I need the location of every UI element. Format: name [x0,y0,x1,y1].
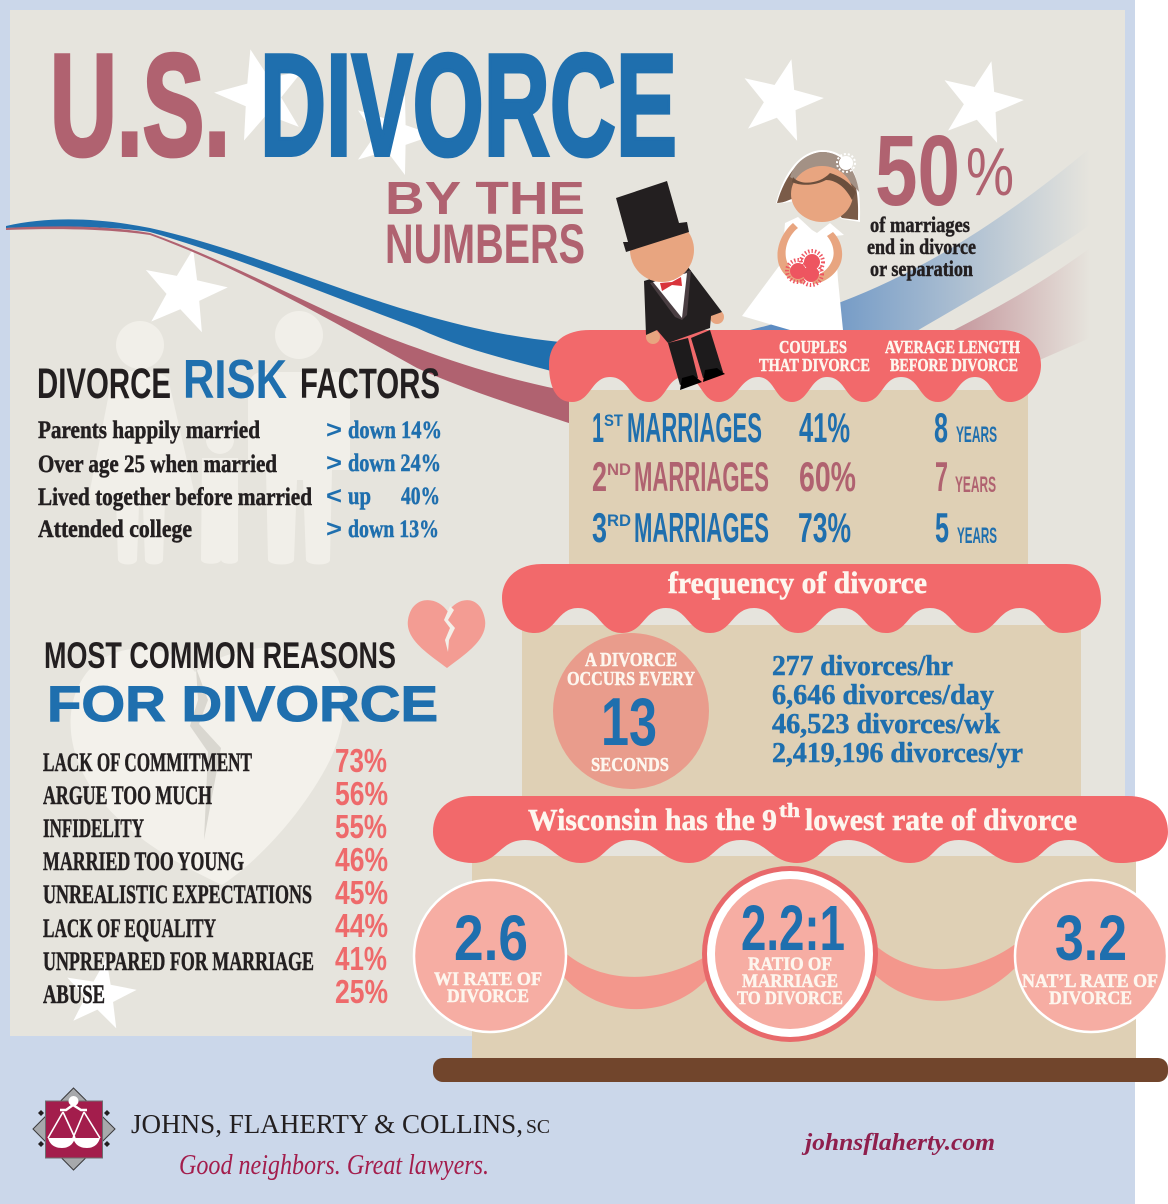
text block: reasons list: UNPREPARED FOR MARRIAGE [43,947,314,976]
table: marriages statistics: 3 [592,504,607,551]
table header: couples and length: THAT DIVORCE [759,355,870,375]
icon: law firm logo scales [33,1088,115,1170]
circle: a divorce every 13 seconds: OCCURS EVERY [567,668,695,690]
text block: reasons list: LACK OF COMMITMENT [43,748,252,777]
circle: ratio of marriage to divorce [702,866,878,1042]
text: firm name and tagline [131,1109,550,1181]
text block: risk factor list: down 13% [348,516,439,543]
text block: reasons list: ABUSE [43,980,105,1009]
circle: national rate of divorce: 3.2 [1055,902,1127,974]
cake: bottom tier [433,796,1168,1060]
table: marriages statistics: 41% [799,404,850,451]
cake: swags between circles [562,942,1018,1009]
text block: reasons percentages [335,742,388,1010]
text block: divorce rates [772,651,1023,769]
text block: risk factor list: down 14% [348,417,442,444]
table: marriages statistics [592,404,997,551]
text block: divorce rates: 46,523 divorces/wk [772,709,1000,740]
text block: reasons percentages: 73% [335,742,387,779]
table: marriages statistics: 73% [798,504,851,551]
table: marriages statistics: 5 [935,504,949,551]
text block: risk factor list: Over age 25 when married [38,451,277,478]
callout: 50 percent: of marriages [870,212,970,237]
text block: reasons percentages: 46% [335,841,388,878]
table: marriages statistics: MARRIAGES [627,404,762,451]
text: firm name and tagline: Good neighbors. Great lawyers. [179,1150,489,1181]
silhouette: broken heart behind reasons [71,647,343,885]
circle: a divorce every 13 seconds: 13 [601,684,657,760]
cake: middle tier [502,564,1101,800]
heading: most common reasons for divorce [44,635,438,732]
heading: divorce risk factors [37,348,440,410]
text block: reasons list [43,748,314,1009]
callout: 50 percent: end in divorce [867,234,976,259]
icon: broken heart [408,600,485,668]
background stars [60,38,1031,1031]
text block: risk factor list: down 24% [348,450,441,477]
heading: divorce risk factors: DIVORCE [37,360,171,408]
title: NUMBERS [385,212,585,275]
title: DIVORCE [260,24,677,186]
table: marriages statistics: ST [604,411,624,430]
circle: ratio of marriage to divorce: MARRIAGE [742,971,838,992]
ribbon: fading blue band at right [750,148,1090,332]
circle: ratio of marriage to divorce: RATIO OF [748,954,832,975]
circle: ratio of marriage to divorce: 2.2:1 [741,892,845,964]
cake: base board [433,1058,1168,1082]
text block: reasons list: LACK OF EQUALITY [43,914,216,943]
text block: risk factor list: up [348,483,371,510]
figure: groom [616,181,725,390]
text block: risk factor list: Lived together before married [38,484,312,511]
circle: national rate of divorce [1015,880,1167,1032]
table: marriages statistics: 1 [592,404,604,451]
table: marriages statistics: 60% [799,453,856,500]
ribbon: fading rose band at right [950,248,1090,362]
circle: ratio of marriage to divorce: TO DIVORCE [737,988,843,1009]
text block: reasons percentages: 41% [335,940,387,977]
circle: a divorce every 13 seconds: A DIVORCE [585,649,677,671]
callout: 50 percent [867,115,1014,281]
table: marriages statistics: MARRIAGES [634,504,769,551]
circle: national rate of divorce: DIVORCE [1049,988,1132,1009]
table header: couples and length: BEFORE DIVORCE [890,355,1018,375]
table: marriages statistics: RD [607,511,631,530]
text block: reasons percentages: 44% [335,907,388,944]
text block: risk factor list: 40% [401,483,440,510]
heading: wisconsin rate: Wisconsin has the 9 [528,802,777,837]
circle: national rate of divorce: NAT’L RATE OF [1022,971,1158,992]
table header: couples and length [759,337,1020,375]
text block: risk factor list [38,416,442,543]
text block: reasons percentages: 45% [335,874,388,911]
title: BY THE [385,172,585,224]
text block: reasons percentages: 25% [335,973,388,1010]
table: marriages statistics: YEARS [957,523,997,548]
text block: risk factor list: Parents happily married [38,417,260,444]
silhouette: family behind risk factors [88,311,350,564]
heading: wisconsin rate: lowest rate of divorce [805,802,1077,837]
heading: most common reasons for divorce: FOR DIVORCE [47,676,438,732]
title [50,24,677,275]
text: firm name and tagline: JOHNS, FLAHERTY & COLLINS, [131,1109,523,1139]
heading: divorce risk factors: RISK [183,348,287,410]
table: marriages statistics: 2 [592,453,607,500]
icon: bouquet [787,251,823,285]
circle: a divorce every 13 seconds [553,633,709,789]
ribbon: blue swoosh [6,219,560,372]
text block: reasons list: INFIDELITY [43,814,144,843]
table: marriages statistics: MARRIAGES [634,453,769,500]
circle: WI rate of divorce [414,880,566,1032]
text block: risk factor list: < [326,482,342,510]
callout: 50 percent: 50 [875,115,960,227]
table: marriages statistics: 8 [934,404,948,451]
heading: wisconsin rate [528,800,1077,837]
callout: 50 percent: % [966,134,1014,210]
circle: WI rate of divorce: DIVORCE [447,986,529,1007]
text block: divorce rates: 6,646 divorces/day [772,680,994,711]
text block: risk factor list: > [326,449,342,477]
circle: WI rate of divorce: WI RATE OF [434,969,542,990]
text block: reasons list: MARRIED TOO YOUNG [43,847,244,876]
circle: WI rate of divorce: 2.6 [454,902,528,974]
text block: risk factor list: Attended college [38,516,192,543]
table: marriages statistics: 7 [935,453,948,500]
heading: most common reasons for divorce: MOST COMMON REASONS [44,635,396,676]
text: firm name and tagline: SC [526,1116,550,1138]
table: marriages statistics: ND [607,460,631,479]
heading: divorce risk factors: FACTORS [300,360,440,408]
text block: risk factor list: > [326,515,342,543]
heading: wisconsin rate: th [779,800,800,822]
text block: divorce rates: 2,419,196 divorces/yr [772,738,1023,769]
text block: risk factor list: > [326,416,342,444]
text block: reasons list: UNREALISTIC EXPECTATIONS [43,880,312,909]
circle: a divorce every 13 seconds: SECONDS [591,754,669,776]
text block: reasons list: ARGUE TOO MUCH [43,781,212,810]
callout: 50 percent: or separation [870,256,973,281]
table header: couples and length: AVERAGE LENGTH [885,337,1020,357]
cake: top tier [549,330,1041,570]
figure: bride [742,150,860,330]
table header: couples and length: COUPLES [779,337,847,357]
ribbon: rose swoosh [6,226,572,424]
heading: frequency of divorce: frequency of divorce [668,565,927,600]
table: marriages statistics: YEARS [955,472,996,497]
title: U.S. [50,24,230,186]
table: marriages statistics: YEARS [956,422,997,447]
text block: reasons percentages: 56% [335,775,388,812]
text: website: johnsflaherty.com [801,1130,995,1156]
text block: reasons percentages: 55% [335,808,387,845]
text block: divorce rates: 277 divorces/hr [772,651,953,682]
